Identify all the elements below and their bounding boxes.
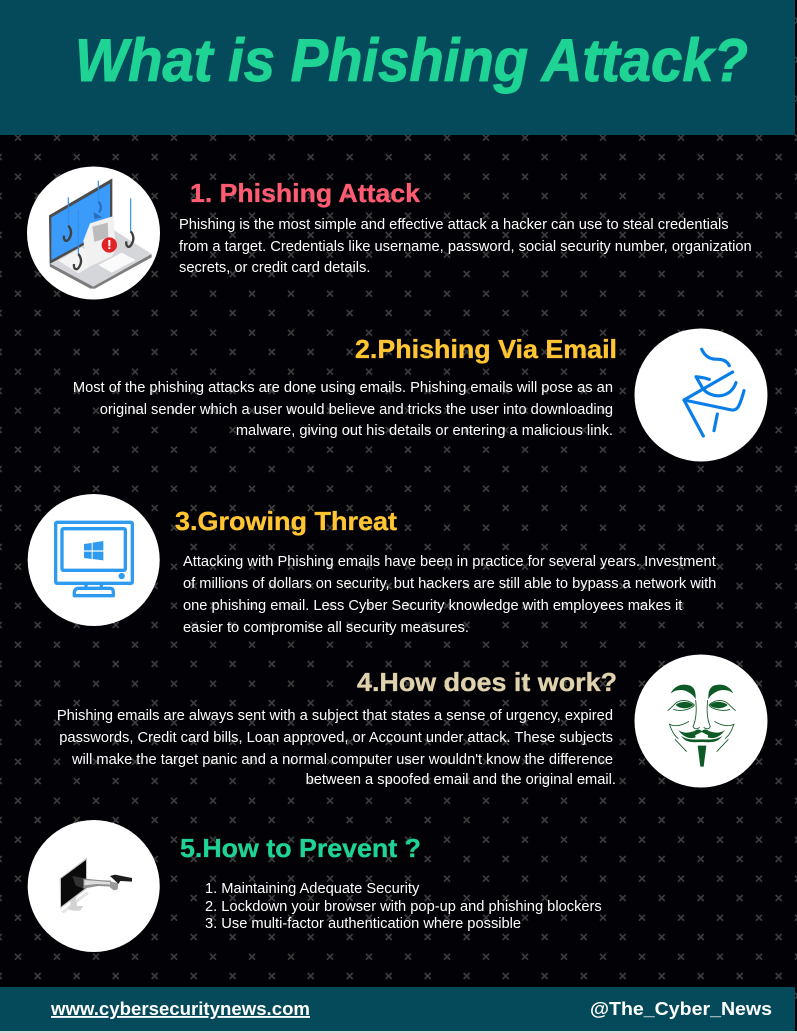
text block 4: will make the target panic and a normal computer user wouldn't know the difference <box>71 752 613 768</box>
icon: envelope <box>634 328 768 462</box>
text block 4 <box>57 708 616 788</box>
icon: monitor <box>28 494 160 626</box>
text block 1: from a target. Credentials like username, password, social security number, organization <box>179 239 752 255</box>
header band <box>0 0 795 135</box>
text block 4: Phishing emails are always sent with a subject that states a sense of urgency, expired <box>57 708 613 724</box>
icon: laptop with fishing hooks <box>27 166 160 300</box>
text block 4: passwords, Credit card bills, Loan approved, or Account under attack. These subjects <box>59 730 613 746</box>
section 1: phishing attack <box>27 166 752 300</box>
text block 2: Most of the phishing attacks are done using emails. Phishing emails will pose as an <box>73 380 613 396</box>
footer band <box>0 987 797 1033</box>
prevention list <box>205 881 602 932</box>
text block 4: between a spoofed email and the original email. <box>306 772 616 788</box>
heading 1: 1. Phishing Attack <box>190 178 421 208</box>
text block 3: one phishing email. Less Cyber Security knowledge with employees makes it <box>183 598 682 614</box>
heading 2: 2.Phishing Via Email <box>355 334 617 364</box>
text block 2: original sender which a user would believe and tricks the user into downloading <box>100 402 613 418</box>
heading 4: 4.How does it work? <box>357 667 617 697</box>
text block 3: Attacking with Phishing emails have been in practice for several years. Investment <box>183 554 716 570</box>
title: What is Phishing Attack? <box>75 27 748 94</box>
text block 1 <box>179 217 752 276</box>
text block 1: secrets, or credit card details. <box>179 260 370 276</box>
prevention list: 1. Maintaining Adequate Security <box>205 881 420 897</box>
prevention list: 3. Use multi-factor authentication where possible <box>205 916 521 932</box>
icon: hand with gun from monitor <box>28 820 160 952</box>
prevention list: 2. Lockdown your browser with pop-up and phishing blockers <box>205 899 602 915</box>
text block 3 <box>183 554 716 636</box>
section 5: how to prevent <box>28 820 602 952</box>
section 2: phishing via email <box>73 328 768 462</box>
section 3: growing threat <box>28 494 716 636</box>
footer website link: www.cybersecuritynews.com <box>50 998 310 1019</box>
text block 3: easier to compromise all security measures. <box>183 620 469 636</box>
text block 3: of millions of dollars on security, but hackers are still able to bypass a network with <box>183 576 716 592</box>
text block 1: Phishing is the most simple and effective attack a hacker can use to steal credentials <box>179 217 729 233</box>
footer social handle: @The_Cyber_News <box>590 998 772 1019</box>
heading 3: 3.Growing Threat <box>175 506 397 536</box>
icon: anonymous mask <box>634 654 768 788</box>
heading 5: 5.How to Prevent ? <box>180 833 421 863</box>
text block 2 <box>73 380 613 439</box>
text block 2: malware, giving out his details or entering a malicious link. <box>236 423 613 439</box>
section 4: how does it work <box>57 654 768 788</box>
